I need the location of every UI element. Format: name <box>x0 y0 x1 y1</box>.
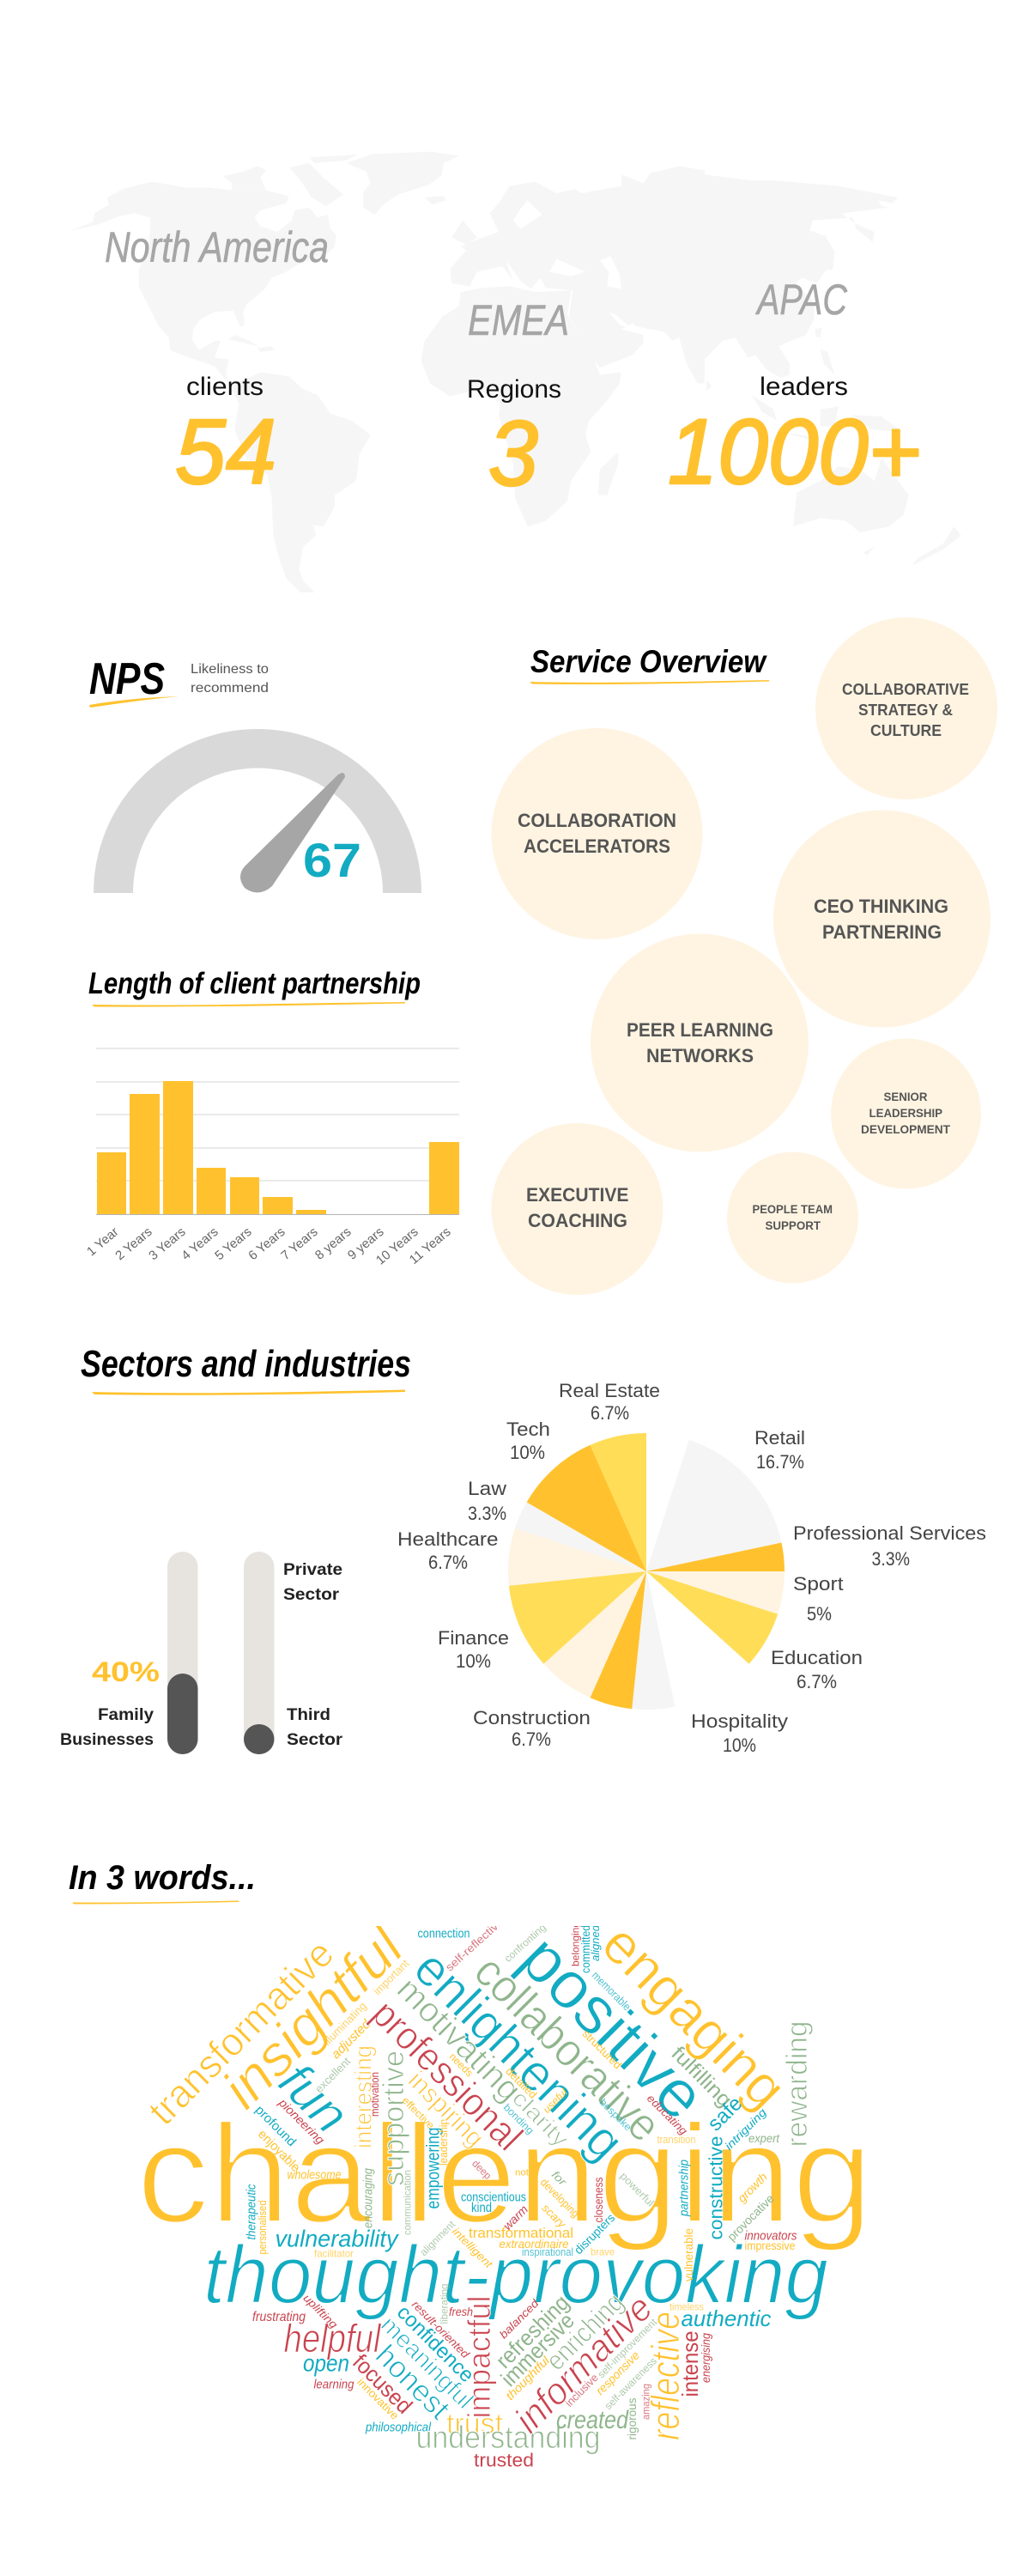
bubble: collaborative strategy and culture <box>815 617 997 799</box>
caption: likeliness to recommend: Likeliness to <box>191 662 269 677</box>
sector meter: private and third sector: Sector <box>283 1586 340 1604</box>
word cloud: trusted <box>474 2450 534 2471</box>
word cloud: committed <box>579 1925 592 1973</box>
word cloud: engaging <box>591 1911 799 2120</box>
heading underline <box>92 1389 405 1395</box>
sector meter: private and third sector: Private <box>283 1561 342 1579</box>
bar chart: 8 years <box>312 1224 354 1263</box>
word cloud: enriching <box>540 2287 629 2376</box>
heading: service overview: Service Overview <box>530 644 767 679</box>
number: 54: 54 <box>175 399 276 503</box>
word cloud: timeless <box>670 2301 704 2313</box>
bubble: senior leadership development: DEVELOPMENT <box>861 1122 950 1136</box>
pie labels: Law <box>468 1478 506 1499</box>
world map background <box>69 152 961 592</box>
word cloud: confronting <box>502 1921 548 1965</box>
word cloud: immersive <box>495 2307 579 2391</box>
pie labels: 6.7% <box>797 1671 837 1692</box>
word cloud: intriguing <box>722 2105 769 2153</box>
bubble: senior leadership development <box>831 1039 981 1188</box>
sector meter: private and third sector: Third <box>287 1706 330 1724</box>
word cloud: memorable <box>590 1969 633 2013</box>
word cloud: intense <box>677 2330 703 2397</box>
pie labels: Construction <box>473 1707 591 1728</box>
heading: NPS: NPS <box>89 654 165 704</box>
word cloud: transformational <box>469 2225 573 2241</box>
word cloud: clarity <box>507 2085 574 2152</box>
gauge needle <box>240 773 345 893</box>
word cloud: educating <box>645 2092 691 2138</box>
word cloud: open <box>303 2349 349 2376</box>
sector meter: family businesses: 40% <box>92 1656 160 1687</box>
word cloud: uplifting <box>300 2292 341 2331</box>
word cloud: responsive <box>593 2348 642 2397</box>
word cloud: scary <box>539 2202 570 2232</box>
word cloud: bespoke <box>597 2096 634 2134</box>
word cloud: belonging <box>570 1922 582 1966</box>
bar chart: 9 years <box>345 1224 387 1263</box>
pie labels: Healthcare <box>397 1528 498 1550</box>
pie labels: Finance <box>438 1627 509 1649</box>
word cloud: enlightening <box>403 1939 635 2171</box>
word cloud: helpful <box>283 2316 382 2360</box>
word cloud: inspirational <box>522 2245 573 2258</box>
pie labels: 6.7% <box>512 1728 551 1750</box>
bar chart: 3 Years <box>146 1224 189 1263</box>
heading underline <box>530 680 769 684</box>
pie labels: Professional Services <box>793 1522 986 1544</box>
region label: North America: North America <box>105 223 329 271</box>
word cloud: partnership <box>676 2160 692 2217</box>
word cloud: vulnerable <box>682 2228 695 2281</box>
word cloud: thoughtful <box>503 2353 553 2403</box>
word cloud: closeness <box>591 2178 605 2222</box>
word cloud: motivating <box>390 1970 529 2109</box>
bar chart <box>84 1048 459 1268</box>
word cloud: innovative <box>354 2375 402 2422</box>
word cloud: focused <box>348 2348 418 2419</box>
bubble: peer learning networks: NETWORKS <box>646 1045 754 1066</box>
word cloud: useful <box>541 2087 570 2116</box>
word cloud: confidence <box>392 2301 478 2387</box>
word cloud: supportive <box>378 2050 410 2186</box>
bar chart: 11 Years <box>407 1224 454 1267</box>
word cloud: bonding <box>501 2101 536 2136</box>
bubble: collaboration accelerators: ACCELERATORS <box>524 835 670 857</box>
label: regions: Regions <box>467 375 561 404</box>
word cloud: fresh <box>449 2305 473 2318</box>
sector meter: family businesses: Businesses <box>60 1731 154 1749</box>
region label: APAC: APAC <box>755 276 848 324</box>
word cloud: therapeutic <box>244 2184 259 2239</box>
word cloud: conscientious <box>461 2190 526 2205</box>
word cloud: interesting <box>349 2045 376 2148</box>
word cloud: philosophical <box>365 2420 432 2435</box>
word cloud: frustrating <box>252 2310 306 2324</box>
word cloud: safe <box>703 2092 747 2136</box>
bar chart: 5 Years <box>212 1224 255 1263</box>
word cloud: vulnerability <box>275 2225 399 2251</box>
word cloud: rigorous <box>625 2397 639 2440</box>
pie chart: sectors <box>508 1433 785 1710</box>
bar chart: 6 Years <box>245 1224 288 1263</box>
panel: service overview <box>491 617 997 1295</box>
sector meter: family businesses <box>60 1552 197 1754</box>
word cloud: brave <box>591 2246 615 2258</box>
word cloud: result-oriented <box>409 2298 472 2361</box>
word cloud: connection <box>417 1927 470 1941</box>
bar chart: 7 Years <box>278 1224 321 1263</box>
pie labels: 10% <box>510 1442 545 1463</box>
word cloud: authentic <box>682 2306 771 2331</box>
pie labels: 6.7% <box>591 1402 629 1424</box>
heading underline <box>89 696 179 708</box>
word cloud: meaningful <box>376 2311 479 2414</box>
bubble: senior leadership development: LEADERSHIP <box>869 1106 942 1120</box>
heading: in 3 words: In 3 words... <box>69 1859 256 1897</box>
word: thought-provoking: thought-provoking <box>203 2229 828 2321</box>
stats: regions and counts <box>105 223 921 505</box>
word cloud: created <box>556 2406 629 2434</box>
number: 3: 3 <box>488 401 538 505</box>
word cloud: powerful <box>618 2170 657 2208</box>
word cloud: insightful <box>209 1914 416 2120</box>
bubble: CEO thinking partnering: PARTNERING <box>822 921 942 943</box>
bubble: senior leadership development: SENIOR <box>884 1090 927 1103</box>
bubble: collaboration accelerators <box>491 728 702 939</box>
sector meter: private and third sector <box>244 1552 343 1754</box>
word cloud: pioneering <box>276 2095 327 2147</box>
word cloud: refreshing <box>490 2289 574 2373</box>
label: clients: clients <box>186 373 264 401</box>
word cloud: rewarding <box>781 2021 814 2147</box>
bubble: collaborative strategy and culture: STRATEGY & <box>858 702 953 719</box>
word cloud: alignment <box>417 2218 458 2258</box>
word cloud: deep <box>470 2158 494 2182</box>
bar chart: 2 Years <box>112 1224 155 1263</box>
word cloud: disrupters <box>572 2211 617 2257</box>
word cloud: innovators <box>745 2229 797 2243</box>
bubble: peer learning networks: PEER LEARNING <box>627 1019 773 1041</box>
word cloud: impressive <box>745 2239 796 2252</box>
word cloud: fun <box>268 2051 360 2144</box>
bar chart: 1 Year <box>84 1224 122 1259</box>
panel: NPS <box>89 654 421 893</box>
word cloud: impactful <box>462 2296 497 2418</box>
word cloud: empowering <box>423 2128 443 2208</box>
sector meter: family businesses: Family <box>98 1706 154 1724</box>
word cloud: inclusive <box>562 2371 601 2409</box>
word cloud: growth <box>735 2170 770 2205</box>
pie labels: Tech <box>506 1419 550 1440</box>
bubble: collaboration accelerators: COLLABORATION <box>518 810 676 831</box>
word cloud: transformative <box>139 1930 342 2134</box>
pie labels: 6.7% <box>428 1552 468 1573</box>
word cloud: extraordinaire <box>500 2237 569 2251</box>
word cloud: wholesome <box>287 2167 342 2183</box>
word cloud: detailed <box>503 2064 540 2101</box>
word cloud: informative <box>506 2287 661 2441</box>
bubble: people team support: SUPPORT <box>766 1219 821 1232</box>
pie labels: 10% <box>723 1735 756 1756</box>
word cloud: aligned <box>589 1924 602 1961</box>
word cloud: positive <box>506 1920 720 2134</box>
word cloud: leadership <box>437 2119 450 2166</box>
bubble: collaborative strategy and culture: CULTURE <box>870 722 942 739</box>
bar chart: 4 Years <box>179 1224 221 1263</box>
word cloud: developing <box>538 2176 582 2220</box>
word cloud: self-reflective <box>443 1916 506 1974</box>
bar chart: 10 Years <box>373 1224 421 1268</box>
word cloud <box>136 1911 873 2471</box>
heading underline <box>92 1002 405 1007</box>
word cloud: facilitator <box>314 2248 354 2260</box>
heading: length of client partnership: Length of client partnership <box>88 967 421 1000</box>
pie labels: 3.3% <box>872 1548 910 1570</box>
word cloud: provocative <box>724 2191 777 2244</box>
word cloud: learning <box>314 2377 354 2392</box>
word cloud: encouraging <box>360 2167 376 2228</box>
word cloud: for <box>549 2168 570 2189</box>
word cloud: constructive <box>706 2136 727 2239</box>
word cloud: understanding <box>415 2420 601 2455</box>
bubble: executive coaching <box>491 1123 663 1295</box>
pie labels: Real Estate <box>559 1380 660 1401</box>
word cloud: not <box>515 2167 529 2178</box>
number: 1000+: 1000+ <box>668 399 921 503</box>
pie labels: Retail <box>754 1427 805 1449</box>
word cloud: balanced <box>497 2296 542 2341</box>
NPS score: 67 <box>303 833 361 887</box>
bubble: people team support: PEOPLE TEAM <box>752 1203 833 1216</box>
label: leaders: leaders <box>760 373 848 401</box>
word cloud: needs <box>447 2050 476 2079</box>
word cloud: communication <box>402 2170 414 2235</box>
word cloud: illuminating <box>320 1999 369 2048</box>
word cloud: intelligent <box>450 2225 496 2271</box>
word cloud: amazing <box>640 2384 652 2420</box>
sector meter: private and third sector: Sector <box>287 1731 343 1749</box>
word cloud: adjusted <box>329 2016 374 2062</box>
bubble: CEO thinking partnering <box>773 811 991 1027</box>
word cloud: fulfilling <box>667 2042 736 2111</box>
bubble: peer learning networks <box>591 934 809 1152</box>
word cloud: excellent <box>312 2055 354 2095</box>
word cloud: collaborative <box>464 1946 670 2152</box>
bubble: collaborative strategy and culture: COLLABORATIVE <box>842 681 969 698</box>
pie labels: Education <box>771 1647 863 1668</box>
region label: EMEA: EMEA <box>468 296 569 344</box>
word cloud: self-awareness <box>602 2354 659 2412</box>
word cloud: profound <box>252 2103 299 2149</box>
bubble: executive coaching: COACHING <box>528 1210 627 1231</box>
word cloud: trust <box>446 2408 504 2440</box>
word cloud: effective <box>400 2094 437 2132</box>
caption: likeliness to recommend: recommend <box>191 681 269 696</box>
pie labels: 10% <box>456 1650 491 1672</box>
pie labels: Hospitality <box>691 1710 788 1732</box>
heading: sectors and industries: Sectors and industries <box>81 1343 411 1385</box>
panel: sectors and industries <box>60 1343 986 1756</box>
pie labels: 3.3% <box>468 1503 506 1524</box>
word: challenging: challenging <box>136 2095 873 2252</box>
word cloud: motivation <box>368 2072 381 2117</box>
word cloud: important <box>371 1957 412 1997</box>
word cloud: warm <box>500 2202 530 2233</box>
word cloud: inspiring <box>403 2066 489 2153</box>
word cloud: honest <box>369 2338 457 2426</box>
bubble: people team support <box>727 1152 858 1283</box>
word cloud: self-improvement <box>595 2316 660 2380</box>
word cloud: structured <box>580 2027 624 2071</box>
word cloud: personalised <box>256 2200 269 2255</box>
gauge arc <box>94 729 421 893</box>
word cloud: liberating <box>439 2284 451 2324</box>
pie labels: 16.7% <box>756 1451 804 1473</box>
word cloud: enjoyable <box>255 2127 303 2175</box>
bubble: CEO thinking partnering: CEO THINKING <box>814 896 948 917</box>
bubble: executive coaching: EXECUTIVE <box>526 1184 628 1206</box>
pie labels: Sport <box>793 1573 843 1595</box>
panel: length of client partnership <box>84 967 459 1268</box>
pie labels <box>397 1380 986 1756</box>
word cloud: energising <box>699 2333 712 2383</box>
pie labels: 5% <box>807 1603 832 1625</box>
word cloud: professional <box>364 1991 531 2159</box>
word cloud: expert <box>748 2131 780 2145</box>
word cloud: reflective <box>643 2312 688 2440</box>
word cloud: kind <box>471 2201 492 2215</box>
word cloud: transition <box>657 2133 695 2146</box>
